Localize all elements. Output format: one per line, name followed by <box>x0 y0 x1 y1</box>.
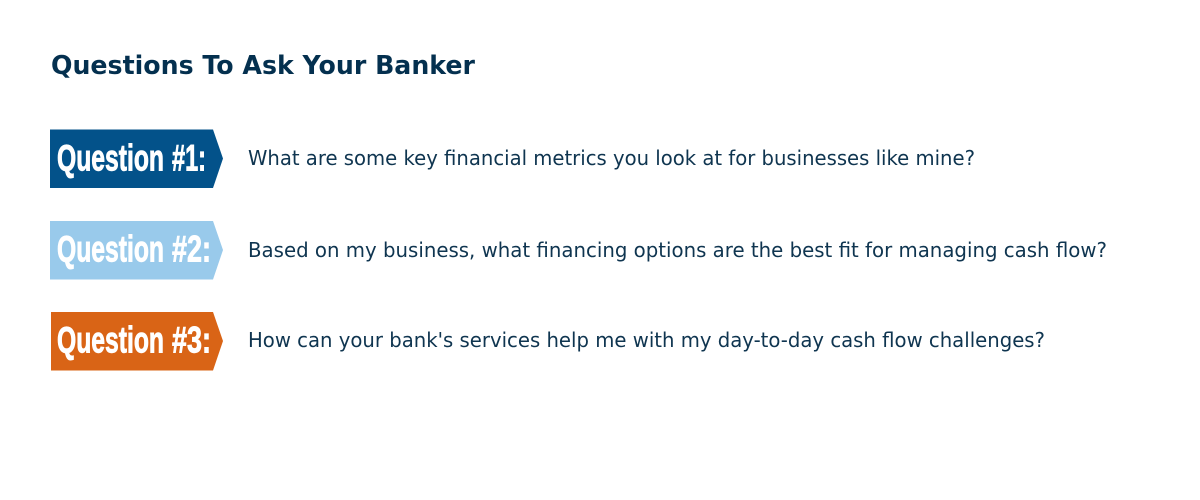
text: question 1: What are some key financial metrics you look at for businesses like mine? <box>248 146 975 170</box>
title: Questions To Ask Your Banker <box>51 51 475 81</box>
banner: question 1: Question <box>57 138 164 178</box>
text: question 2: Based on my business, what financing options are the best fit for managing cash flow? <box>248 238 1107 262</box>
banner: question 3: Question <box>57 320 164 360</box>
text: question 3: How can your bank's services help me with my day-to-day cash flow challenges? <box>248 328 1045 352</box>
question row 2 <box>50 221 1107 280</box>
banner: question 3 <box>51 312 223 370</box>
question row 1 <box>50 130 975 188</box>
banner: question 2 <box>50 221 223 280</box>
banner: question 2: #2: <box>172 228 211 270</box>
banner: question 1: #1: <box>172 138 206 178</box>
question row 3 <box>51 312 1045 370</box>
banner: question 1 <box>50 130 223 188</box>
banner: question 3: #3: <box>172 320 211 360</box>
banner: question 2: Question <box>57 228 164 270</box>
